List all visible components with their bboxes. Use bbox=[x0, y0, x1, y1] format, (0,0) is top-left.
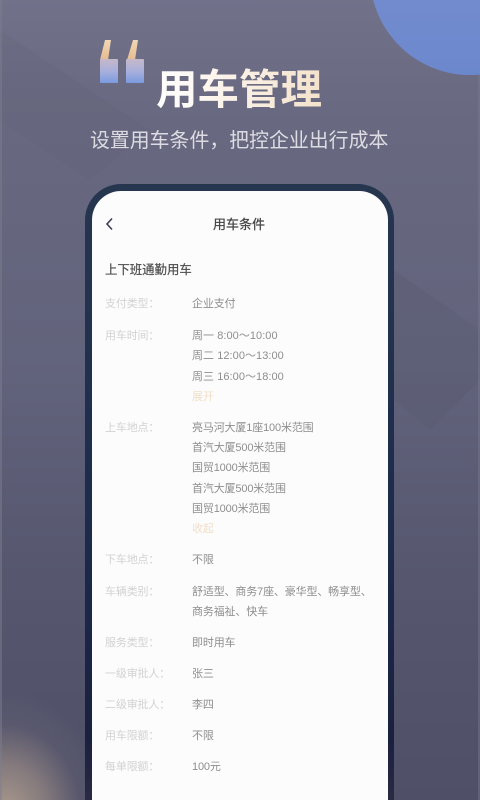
vehicle row bbox=[105, 586, 372, 618]
icon: back arrow bbox=[106, 218, 112, 230]
pickup row: 亮马河大厦1座100米范围 bbox=[192, 422, 314, 434]
pickup row: 首汽大厦500米范围 bbox=[192, 483, 286, 495]
pickup row: 国贸1000米范围 bbox=[192, 503, 270, 515]
time row: 用车时间： bbox=[105, 330, 159, 342]
section heading: 上下班通勤用车 bbox=[105, 263, 192, 277]
pickup row: 首汽大厦500米范围 bbox=[192, 442, 286, 454]
approver 1 row: 张三 bbox=[192, 668, 214, 680]
time row bbox=[105, 330, 284, 403]
service row: 服务类型： bbox=[105, 637, 159, 649]
approver 1 row: 一级审批人： bbox=[105, 668, 170, 680]
approver 2 row: 李四 bbox=[192, 699, 214, 711]
phone screen bbox=[92, 191, 388, 800]
per-order limit row bbox=[105, 760, 221, 773]
subtitle: 设置用车条件，把控企业出行成本 bbox=[90, 130, 388, 152]
payment type row: 支付类型： bbox=[105, 298, 159, 310]
pickup row: 收起 bbox=[192, 523, 214, 535]
time row: 展开 bbox=[192, 391, 214, 403]
service row bbox=[105, 636, 235, 649]
vehicle row: 舒适型、商务7座、豪华型、畅享型、 bbox=[192, 586, 372, 598]
per-order limit row: 每单限额： bbox=[105, 761, 159, 773]
service row: 即时用车 bbox=[192, 637, 235, 649]
approver 1 row bbox=[105, 668, 214, 680]
drop-off row: 下车地点： bbox=[105, 554, 159, 566]
vehicle row: 车辆类别： bbox=[105, 586, 159, 598]
time row: 周二 12:00～13:00 bbox=[192, 350, 284, 362]
time row: 周一 8:00～10:00 bbox=[192, 330, 278, 342]
phone mockup bbox=[85, 184, 394, 800]
pickup row: 国贸1000米范围 bbox=[192, 462, 270, 474]
drop-off row: 不限 bbox=[192, 554, 214, 566]
pickup row bbox=[105, 422, 314, 535]
screen title: 用车条件 bbox=[213, 217, 265, 232]
time row: 周三 16:00～18:00 bbox=[192, 371, 284, 383]
per-order limit row: 100元 bbox=[192, 761, 221, 773]
payment type row bbox=[105, 298, 235, 310]
decorative circle bbox=[370, 0, 480, 75]
approver 2 row bbox=[105, 698, 214, 711]
limit row: 用车限额： bbox=[105, 730, 159, 742]
payment type row: 企业支付 bbox=[192, 298, 235, 310]
vehicle row: 商务福祉、快车 bbox=[192, 606, 268, 618]
pickup row: 上车地点： bbox=[105, 422, 159, 434]
icon: quotation marks bbox=[100, 40, 144, 83]
limit row: 不限 bbox=[192, 730, 214, 742]
limit row bbox=[105, 730, 214, 742]
drop-off row bbox=[105, 554, 214, 566]
approver 2 row: 二级审批人： bbox=[105, 699, 170, 711]
title: 用车管理 bbox=[156, 66, 322, 113]
